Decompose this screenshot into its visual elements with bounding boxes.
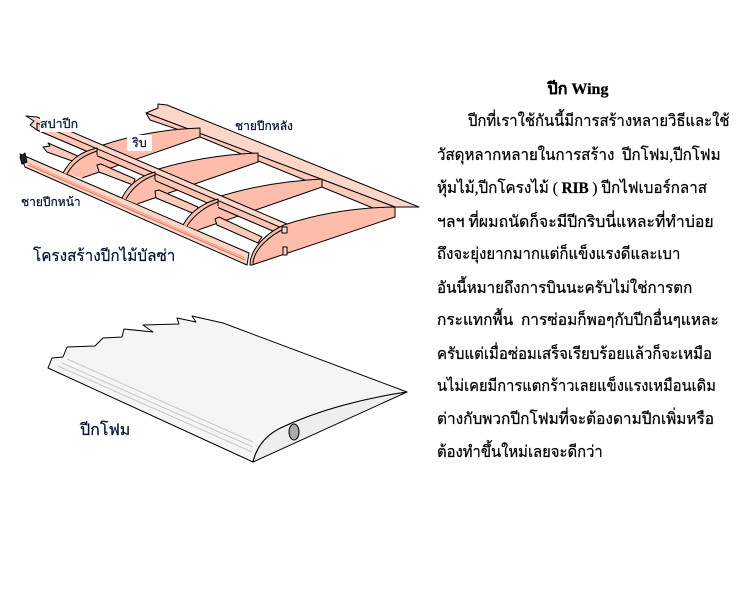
- foam wing top surface: [48, 316, 407, 462]
- article title: ปีก Wing: [548, 81, 608, 98]
- body text: [437, 108, 730, 461]
- rib 4: [250, 207, 395, 265]
- stringer 2: [97, 164, 135, 185]
- caption: balsa wing structure: โครงสร้างปีกไม้บัลซ่า: [33, 248, 175, 265]
- body text: นไม่เคยมีการแตกร้าวเลยแข็งแรงเหมือนเดิม: [437, 378, 716, 395]
- article text: [437, 80, 730, 461]
- label: rib: ริบ: [132, 136, 147, 150]
- body text: กระแทกพื้น การซ่อมก็พอๆกับปีกอื่นๆแหละ: [437, 312, 719, 329]
- body text: ครับแต่เมื่อซ่อมเสร็จเรียบร้อยแล้วก็จะเหมือ: [437, 346, 712, 363]
- body text: อันนี้หมายถึงการบินนะครับไม่ใช่การตก: [437, 280, 692, 297]
- stringer 1: [43, 143, 80, 163]
- label: trailing edge: ชายปีกหลัง: [235, 119, 293, 133]
- body text: ฯลฯ ที่ผมถนัดก็จะมีปีกริบนี่แหละที่ทำบ่อย: [437, 214, 714, 231]
- body text: ต่างกับพวกปีกโฟมที่จะต้องดามปีกเพิ่มหรือ: [437, 411, 714, 428]
- foam wing sheeting lines: [58, 359, 253, 452]
- full rib panels: [82, 128, 322, 230]
- stringer 3: [155, 190, 198, 214]
- label: leading edge: ชายปีกหน้า: [21, 195, 81, 209]
- body text: ปีกที่เราใช้กันนี้มีการสร้างหลายวิธีและใช้: [468, 113, 729, 130]
- body text: ต้องทำขึ้นใหม่เลยจะดีกว่า: [437, 444, 603, 461]
- label: spar: สปาปีก: [40, 117, 78, 131]
- label: rib: [127, 135, 152, 151]
- rib 1 front: [63, 148, 97, 178]
- spar hole: [289, 424, 299, 440]
- main spar: [26, 116, 287, 234]
- body text: วัสดุหลากหลายในการสร้าง ปีกโฟม,ปีกโฟม: [437, 147, 721, 164]
- foam wing: [48, 316, 407, 462]
- rib 2 front: [122, 172, 155, 204]
- body text: หุ้มไม้,ปีกโครงไม้ ( RIB ) ปีกไฟเบอร์กลาส: [437, 180, 707, 197]
- caption: foam wing: ปีกโฟม: [80, 422, 130, 439]
- body text: ถึงจะยุ่งยากมากแต่ก็แข็งแรงดีและเบา: [437, 246, 680, 263]
- leading edge strip: [20, 153, 249, 265]
- foam wing end face: [253, 392, 407, 462]
- rib 3 front: [183, 199, 218, 230]
- stringer 4: [215, 217, 262, 243]
- trailing edge strip: [146, 104, 419, 217]
